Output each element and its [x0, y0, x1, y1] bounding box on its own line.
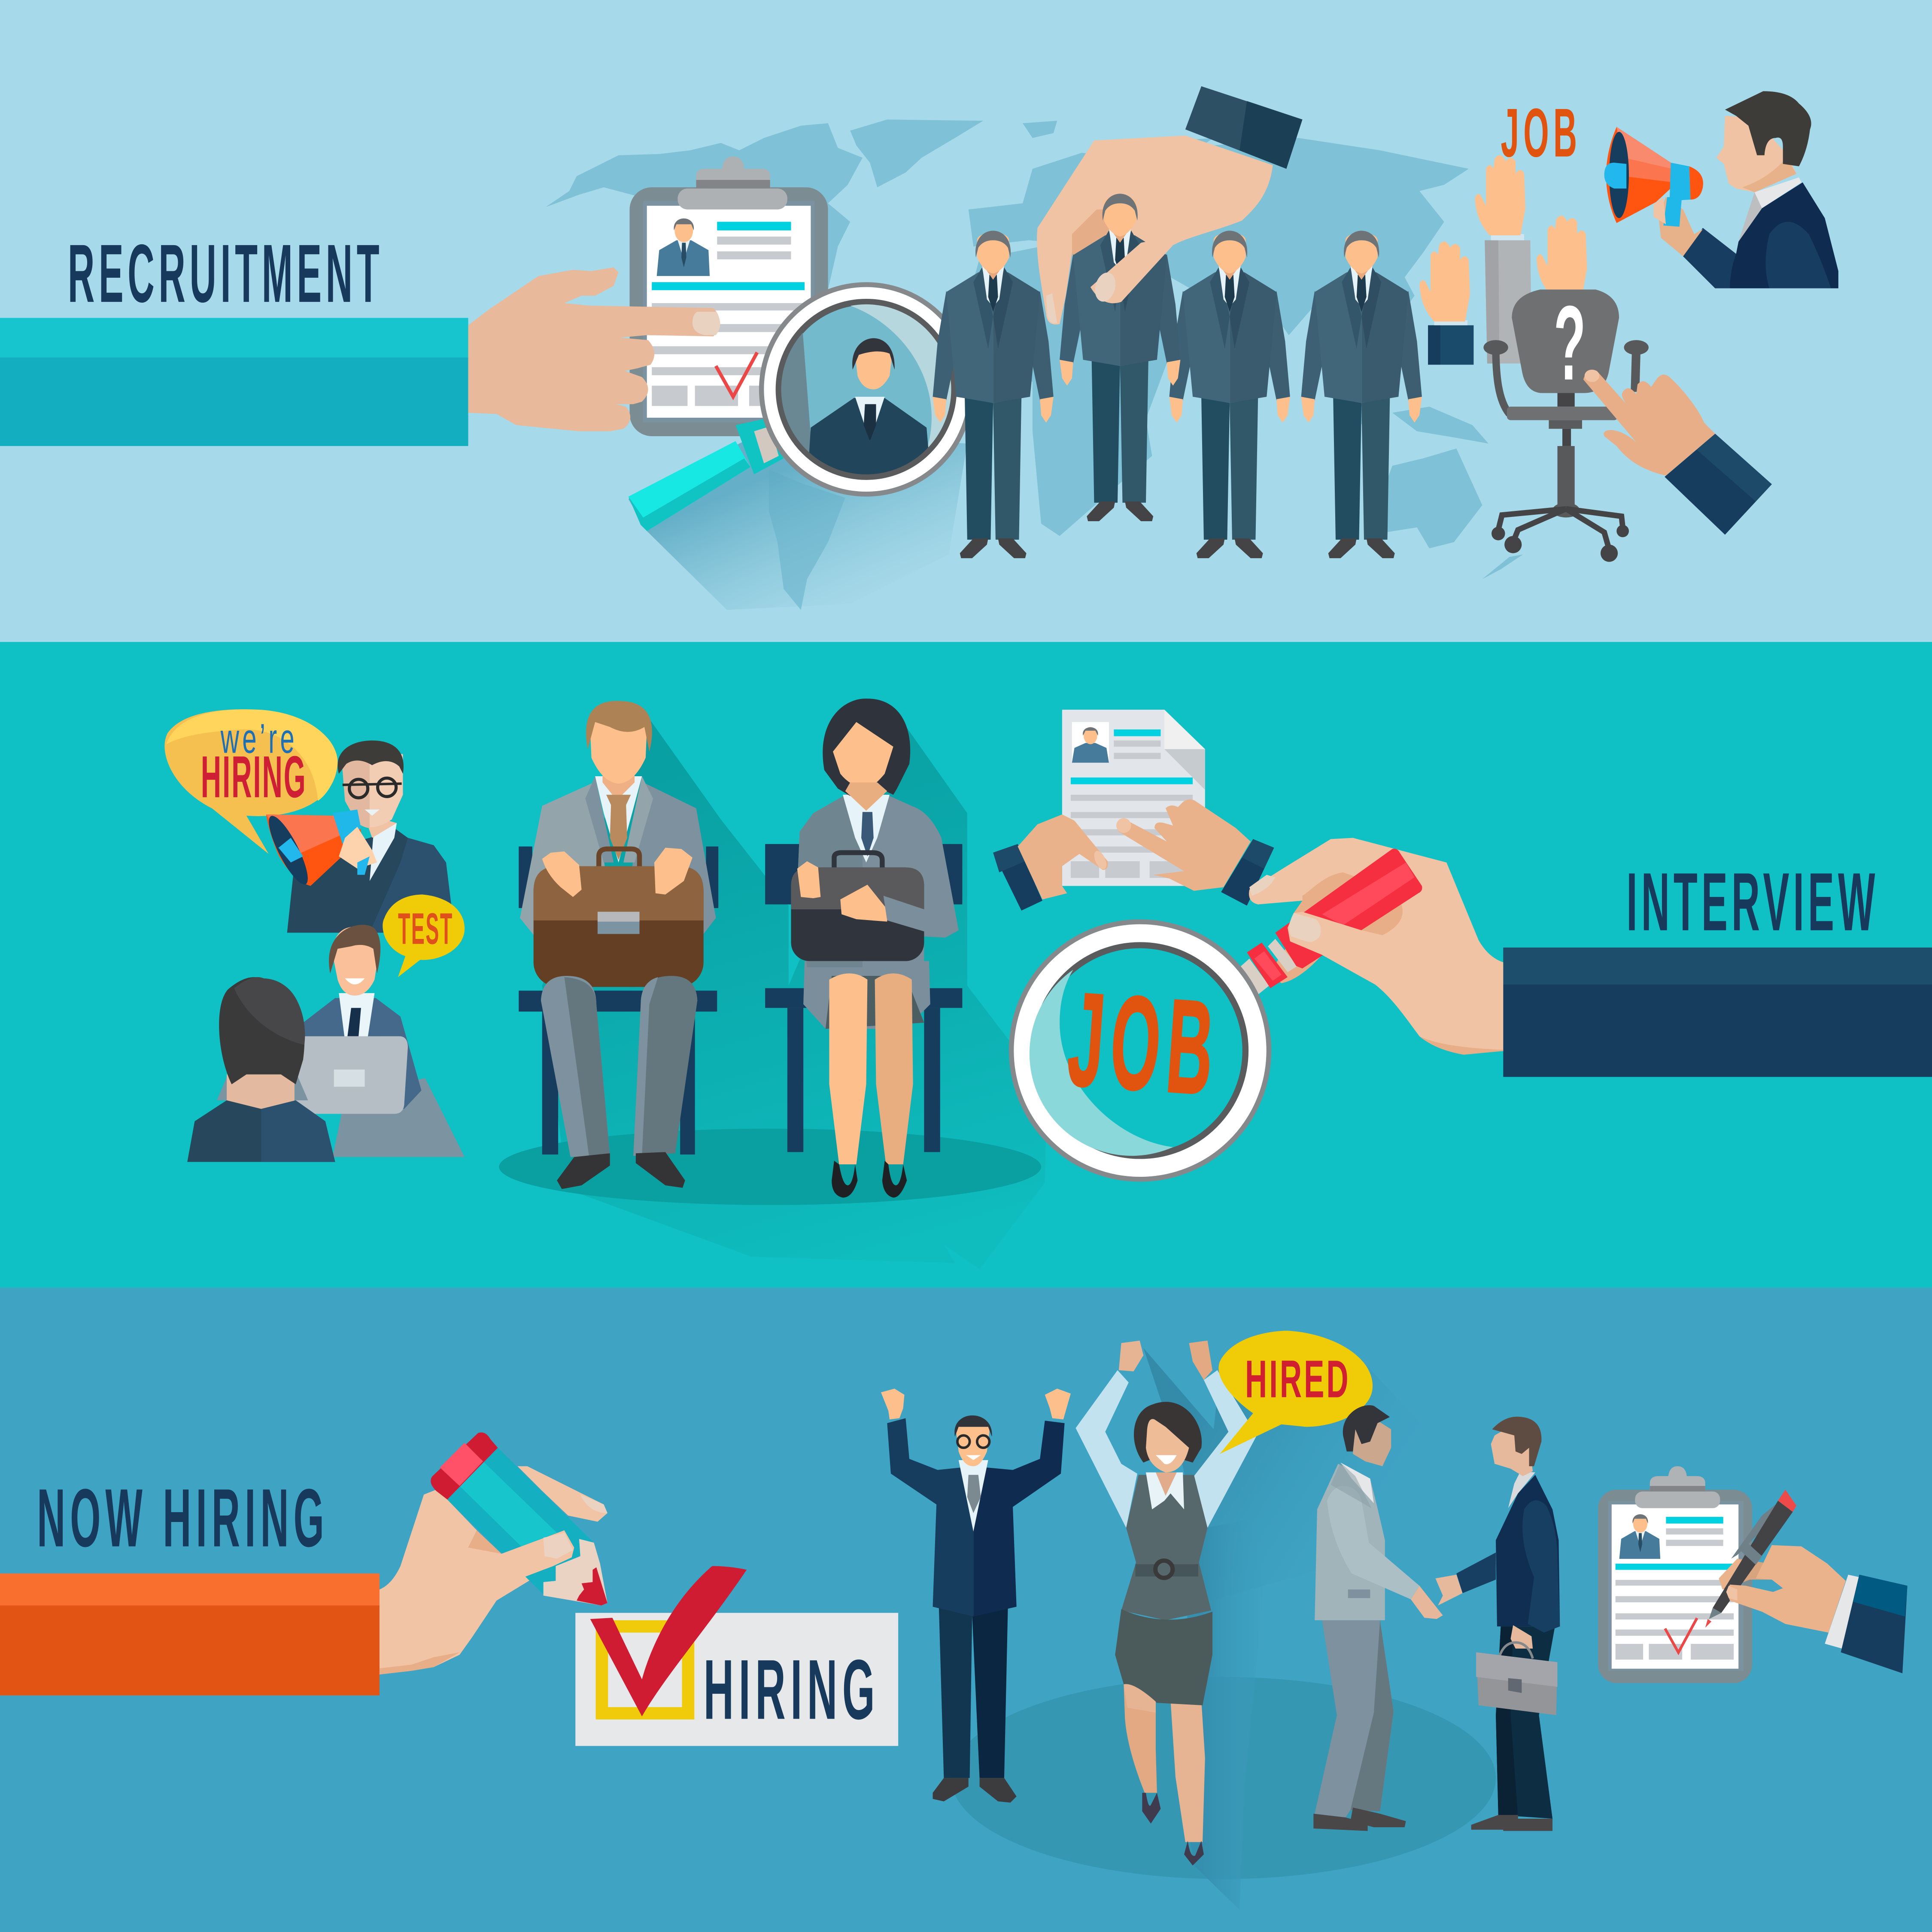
clipboard with pen: [1598, 1466, 1908, 1683]
shadow: magnifier: [629, 431, 967, 610]
man with glasses and megaphone: [262, 741, 455, 933]
panel: recruitment: [0, 0, 1932, 642]
job candidates: [933, 231, 1422, 558]
seated man: [519, 701, 718, 1189]
sleeve: recruitment: [0, 318, 468, 446]
hand with marker: [380, 1432, 608, 1674]
title: recruitment: RECRUITMENT: [68, 227, 380, 319]
man in gray shaking hands: [1313, 1405, 1443, 1831]
clipboard: [630, 156, 828, 436]
hand with job magnifier: JOB: [1064, 965, 1218, 1123]
speech bubble: hired: [1218, 1331, 1373, 1454]
office chair with question mark: ?: [1554, 284, 1586, 402]
speech bubble: we're hiring: [164, 709, 337, 854]
hand picking a candidate: [1037, 86, 1302, 521]
title: now hiring: NOW HIRING: [37, 1472, 324, 1564]
woman shadow: [1170, 1516, 1269, 1910]
cv sheet with hands: [993, 710, 1274, 911]
office chair with question mark: [1483, 284, 1649, 562]
man in navy with briefcase: [1435, 1417, 1560, 1831]
hand pointing at clipboard: [468, 267, 720, 431]
woman seen from behind: [187, 977, 335, 1162]
cheering woman: [1075, 1340, 1257, 1865]
hiring sign: HIRING: [704, 1643, 875, 1738]
speech bubble: we're hiring: HIRING: [201, 744, 306, 810]
seated woman: [765, 699, 962, 1198]
hiring sign: [575, 1566, 898, 1746]
speech bubble: we're hiring: we’re: [220, 716, 295, 762]
speech bubble: test: TEST: [398, 903, 452, 953]
panel: now hiring: [0, 1288, 1932, 1932]
speech bubble: hired: HIRED: [1245, 1350, 1349, 1409]
world map: [546, 119, 1523, 610]
long shadows: [542, 717, 1047, 1269]
raised hands: [1419, 155, 1587, 365]
magnifier: [629, 285, 973, 531]
recruiter with megaphone: [1604, 91, 1838, 289]
ground shadow: [499, 1129, 1041, 1205]
ground shadow: [951, 1677, 1496, 1879]
long shadows: [1143, 1348, 1432, 1602]
hand with job magnifier: [1012, 838, 1503, 1179]
panel: interview: [0, 642, 1932, 1288]
cheering man: [881, 1388, 1071, 1803]
interviewer at laptop: [295, 925, 465, 1157]
sleeve: interview: [1503, 948, 1932, 1077]
sleeve: now hiring: [0, 1574, 380, 1695]
hand pointing at chair: [1583, 370, 1772, 535]
text: job: JOB: [1501, 94, 1577, 171]
speech bubble: test: [383, 895, 465, 977]
title: interview: INTERVIEW: [1626, 856, 1875, 948]
